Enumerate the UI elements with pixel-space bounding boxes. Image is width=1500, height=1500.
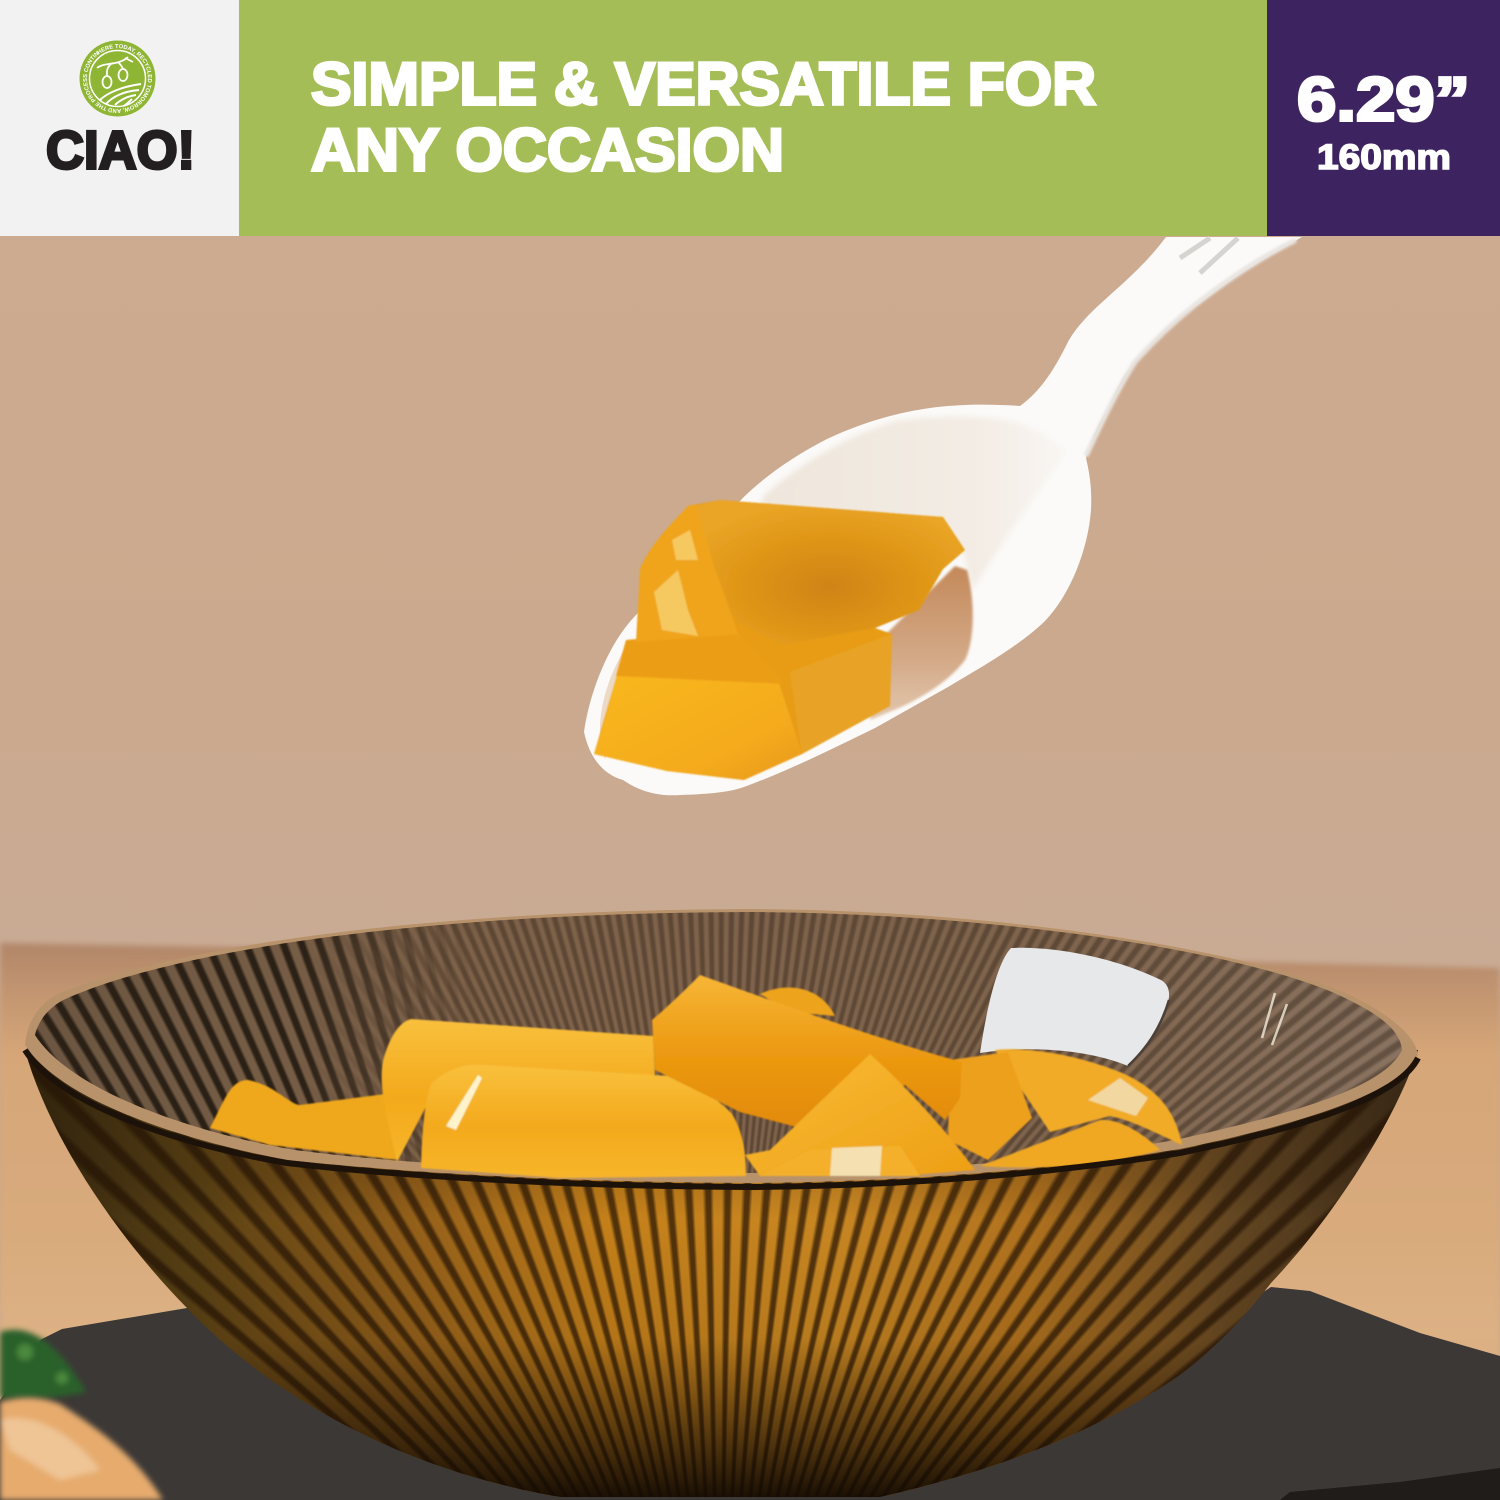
mango: reflective patch — [1088, 1078, 1148, 1116]
wooden table — [0, 940, 1500, 1356]
header: logo panel — [0, 0, 239, 236]
mango: middle band — [616, 630, 785, 684]
serving spoon in bowl — [980, 948, 1169, 1066]
title: ANY OCCASION — [311, 116, 784, 184]
spoon tip inner — [600, 651, 624, 760]
mango: base shape — [594, 500, 965, 780]
mango: front long piece — [421, 1065, 746, 1178]
mango pieces in bowl — [210, 975, 1182, 1178]
header: size panel — [1267, 0, 1500, 236]
size in millimetres: 160mm — [1317, 138, 1451, 177]
slate shadow corner — [1280, 1468, 1500, 1500]
mango: triangular piece — [745, 1054, 975, 1176]
mango: middle piece — [948, 1052, 1032, 1160]
mango on spoon — [594, 500, 965, 780]
bowl front rim line — [25, 1050, 1418, 1187]
pastry garnish — [0, 1398, 163, 1500]
bowl rim — [25, 909, 1418, 1183]
handle grooves — [1180, 238, 1238, 273]
size in inches: 6.29” — [1297, 66, 1470, 134]
spoon shadow under mango — [870, 566, 973, 720]
bowl — [0, 900, 1500, 1500]
bowl shading — [211, 1136, 1262, 1497]
leaf garnish — [0, 1330, 86, 1399]
mango: gloss highlight — [446, 1075, 482, 1130]
mango: reflective patch lower — [830, 1146, 882, 1176]
spoon inner bowl — [760, 416, 1066, 590]
mango: upper piece — [695, 500, 965, 645]
mango: left chunks — [210, 1080, 398, 1160]
mango: large centre piece — [652, 975, 962, 1128]
spoon body and handle — [584, 237, 1302, 795]
background wall — [1210, 953, 1500, 964]
bowl interior — [35, 912, 1402, 1173]
header: title panel — [239, 0, 1267, 236]
glints on bowl glass — [1262, 993, 1287, 1045]
bowl body ribs — [28, 1050, 1418, 1497]
bowl interior ribs — [35, 912, 1402, 1173]
handle shading — [1086, 240, 1296, 456]
logo wordmark: CIAO! — [46, 120, 195, 180]
slate board — [0, 1287, 1500, 1500]
bowl outer body — [25, 1050, 1418, 1497]
mango: right side piece — [995, 1049, 1182, 1145]
mango: back small — [760, 987, 835, 1016]
mango: left glazed face — [636, 504, 738, 642]
white spoon with mango — [584, 237, 1302, 795]
mango: lower slices — [980, 1120, 1160, 1167]
mango: side piece — [790, 634, 892, 754]
mango: lower piece — [594, 672, 802, 780]
mango: glaze highlights — [654, 530, 698, 636]
title: SIMPLE & VERSATILE FOR — [311, 50, 1096, 118]
mango: long left piece — [382, 1019, 655, 1162]
